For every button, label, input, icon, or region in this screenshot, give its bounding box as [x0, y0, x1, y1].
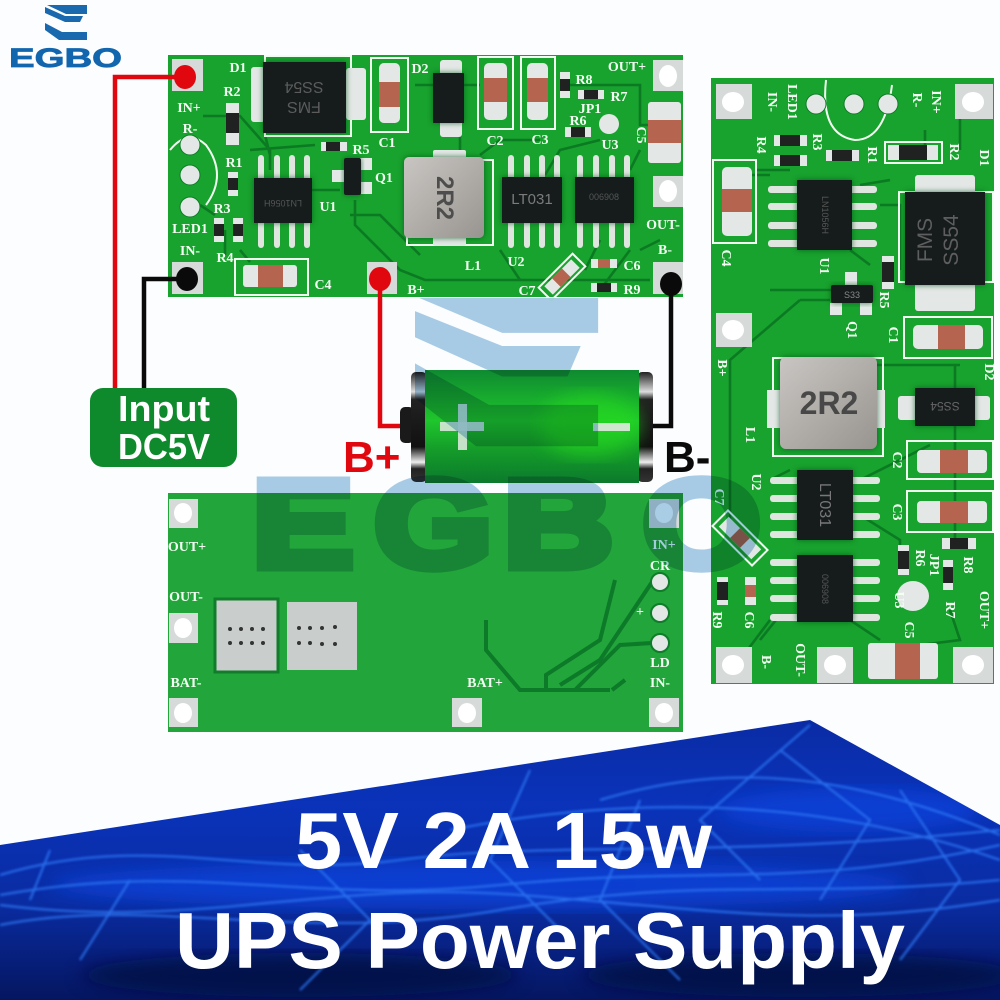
silkscreen labels: C4 [718, 249, 733, 267]
inductor L1 [404, 150, 493, 246]
inductor L1: 2R2 [431, 176, 458, 220]
silkscreen labels: R- [183, 122, 198, 137]
silkscreen labels: U2 [507, 255, 525, 270]
inductor L1: 2R2 [800, 385, 858, 421]
capacitor C4 [713, 160, 756, 243]
diode D2 [433, 60, 464, 137]
silkscreen labels: B- [658, 243, 672, 258]
silkscreen labels: BAT+ [467, 676, 503, 691]
silkscreen labels: C1 [378, 136, 396, 151]
pad: OUT- [169, 613, 198, 643]
silkscreen labels: B+ [407, 283, 425, 298]
capacitor C7 [712, 510, 768, 566]
silkscreen labels: IN+ [928, 90, 943, 114]
silkscreen labels: R7 [610, 90, 628, 105]
watermark text: EGBO [252, 454, 761, 594]
silkscreen labels: OUT- [646, 218, 680, 233]
silkscreen labels: OUT- [792, 643, 807, 677]
silkscreen labels: OUT- [169, 590, 203, 605]
silkscreen labels: C2 [889, 451, 904, 469]
silkscreen labels: R1 [864, 146, 879, 164]
pad: OUT- [653, 176, 683, 207]
silkscreen labels: R5 [876, 291, 891, 309]
heading: 5V 2A 15w: 5V 2A 15w [295, 796, 713, 885]
silkscreen labels: C5 [901, 621, 916, 639]
diode D1 [899, 175, 993, 311]
pad: IN- [172, 262, 203, 294]
diode D2: SS54 [930, 399, 960, 413]
silkscreen labels: U1 [319, 200, 337, 215]
silkscreen labels: R4 [216, 251, 234, 266]
chip U2 [770, 470, 880, 540]
chip U2: LT031 [816, 483, 833, 527]
silkscreen labels: C3 [889, 503, 904, 521]
chip U2: LT031 [511, 191, 553, 208]
silkscreen labels: D2 [411, 62, 429, 77]
chip U3: 006908 [820, 574, 830, 604]
callout: Input DC5V: DC5V [118, 426, 210, 467]
silkscreen labels: + [636, 605, 644, 620]
silkscreen labels: R6 [569, 114, 587, 129]
callout: Input DC5V [90, 388, 237, 467]
panel: bottom PCB back view [168, 493, 683, 732]
pad: IN+ [649, 499, 679, 528]
capacitor C3 [907, 491, 993, 532]
silkscreen labels: LED1 [172, 222, 208, 237]
pad: OUT+ [653, 60, 683, 91]
silkscreen labels: R5 [352, 143, 370, 158]
logo icon [45, 5, 87, 40]
thermal pad right [287, 602, 357, 670]
silkscreen labels: C2 [486, 134, 504, 149]
chip U1: LN1056H [820, 196, 830, 234]
silkscreen labels [168, 538, 676, 691]
diode D2 [898, 388, 990, 426]
silkscreen labels: C7 [518, 284, 536, 299]
silkscreen labels: R- [909, 93, 924, 108]
transistor Q1 [332, 158, 372, 195]
chip U2 [502, 155, 562, 248]
diode D1 [251, 56, 366, 136]
panel: right PCB vertical view [709, 78, 996, 684]
chip U3 [575, 155, 634, 248]
silkscreen labels: CR [650, 559, 671, 574]
silkscreen labels: D1 [976, 149, 991, 167]
chip U1: LN1056H [264, 198, 302, 208]
silkscreen labels: Q1 [375, 171, 393, 186]
silkscreen labels: C3 [531, 133, 549, 148]
connector holes CR + LD [651, 573, 669, 652]
silkscreen labels: U2 [748, 473, 763, 491]
silkscreen labels: R6 [912, 549, 927, 567]
capacitor C3 [521, 57, 555, 129]
connector holes [806, 80, 898, 140]
silkscreen labels: IN+ [652, 538, 676, 553]
pad: B+ [367, 262, 397, 294]
diode D1: SS54 [940, 214, 963, 266]
silkscreen labels: Q1 [844, 321, 859, 339]
silkscreen labels: R8 [960, 556, 975, 574]
silkscreen labels: B- [758, 655, 773, 669]
pads [716, 84, 993, 683]
banner: blue network background [0, 720, 1000, 1000]
capacitor C5 [868, 643, 938, 679]
jumper JP1 [599, 114, 619, 134]
chip U3 [770, 555, 880, 622]
diode D1: FMS [914, 218, 937, 262]
thermal pad left [215, 599, 278, 672]
capacitor C7 [539, 254, 585, 300]
panel: top PCB front view [168, 55, 683, 300]
silkscreen labels: IN- [650, 676, 670, 691]
wires: input and battery connections [115, 65, 682, 426]
transistor Q1 [830, 272, 873, 315]
label: B+: B+ [343, 433, 400, 482]
icon: battery [400, 370, 653, 483]
silkscreen labels: IN- [764, 92, 779, 112]
chip U1 [254, 155, 312, 248]
silkscreen labels: R2 [223, 85, 241, 100]
pad: IN+ [172, 59, 203, 91]
silkscreen labels: IN- [180, 244, 200, 259]
silkscreen labels: U3 [891, 591, 906, 609]
chip U3: 006908 [589, 192, 619, 202]
diode D1: FMS [287, 98, 321, 115]
pad: BAT- [169, 698, 198, 727]
label: B-: B- [664, 433, 710, 482]
silkscreen labels: IN+ [177, 101, 201, 116]
silkscreen labels: LED1 [784, 84, 799, 120]
silkscreen labels: JP1 [579, 102, 601, 117]
capacitor C2 [907, 441, 993, 479]
silkscreen labels: R8 [575, 73, 593, 88]
logo wordmark: EGBO [9, 43, 122, 73]
capacitor C1 [904, 317, 992, 358]
silkscreen labels: R9 [709, 611, 724, 629]
silkscreen labels: R1 [225, 156, 243, 171]
silkscreen labels: C1 [885, 326, 900, 344]
silkscreen labels: L1 [742, 427, 757, 443]
silkscreen labels: U3 [601, 138, 619, 153]
capacitor C5 [648, 102, 681, 163]
silkscreen labels: R2 [946, 143, 961, 161]
silkscreen labels: C4 [314, 278, 332, 293]
transistor Q1: S33 [844, 290, 860, 300]
capacitor C4 [235, 259, 308, 295]
silkscreen labels: U1 [816, 257, 831, 275]
silkscreen labels: R7 [942, 601, 957, 619]
silkscreen labels: R4 [753, 136, 768, 154]
silkscreen labels: C5 [633, 126, 648, 144]
silkscreen labels: R3 [213, 202, 231, 217]
resistors [717, 135, 976, 605]
silkscreen labels: C7 [711, 488, 726, 506]
logo: EGBO [9, 5, 122, 73]
inductor L1 [767, 357, 885, 456]
resistors [214, 72, 617, 292]
silkscreen labels: C6 [741, 611, 756, 629]
silkscreen labels: C6 [623, 259, 641, 274]
silkscreen labels: L1 [465, 259, 481, 274]
chip U1 [768, 180, 877, 250]
silkscreen labels: B+ [714, 359, 729, 377]
capacitor C1 [371, 58, 408, 132]
silkscreen labels: OUT+ [168, 540, 206, 555]
silkscreen labels: LD [650, 656, 670, 671]
silkscreen labels: R3 [809, 133, 824, 151]
pad: IN- [649, 698, 679, 727]
battery connector holes [170, 135, 217, 217]
callout: Input DC5V: Input [118, 388, 210, 429]
diode D1: SS54 [284, 78, 324, 95]
silkscreen labels [172, 60, 680, 299]
silkscreen labels: BAT- [170, 676, 202, 691]
silkscreen labels: OUT+ [608, 60, 646, 75]
pad: B- [653, 262, 683, 294]
silkscreen labels [709, 84, 996, 677]
capacitor C2 [478, 57, 513, 129]
watermark: EGBO logo [252, 298, 761, 594]
jumper JP1 [897, 581, 929, 611]
watermark icon [415, 298, 598, 446]
silkscreen labels: JP1 [926, 554, 941, 576]
silkscreen labels: OUT+ [976, 591, 991, 629]
pad: OUT+ [169, 499, 198, 528]
pad: BAT+ [452, 698, 482, 727]
silkscreen labels: D1 [229, 61, 247, 76]
heading: UPS Power Supply: UPS Power Supply [175, 896, 906, 985]
silkscreen labels: D2 [981, 363, 996, 381]
silkscreen labels: R9 [623, 283, 641, 298]
